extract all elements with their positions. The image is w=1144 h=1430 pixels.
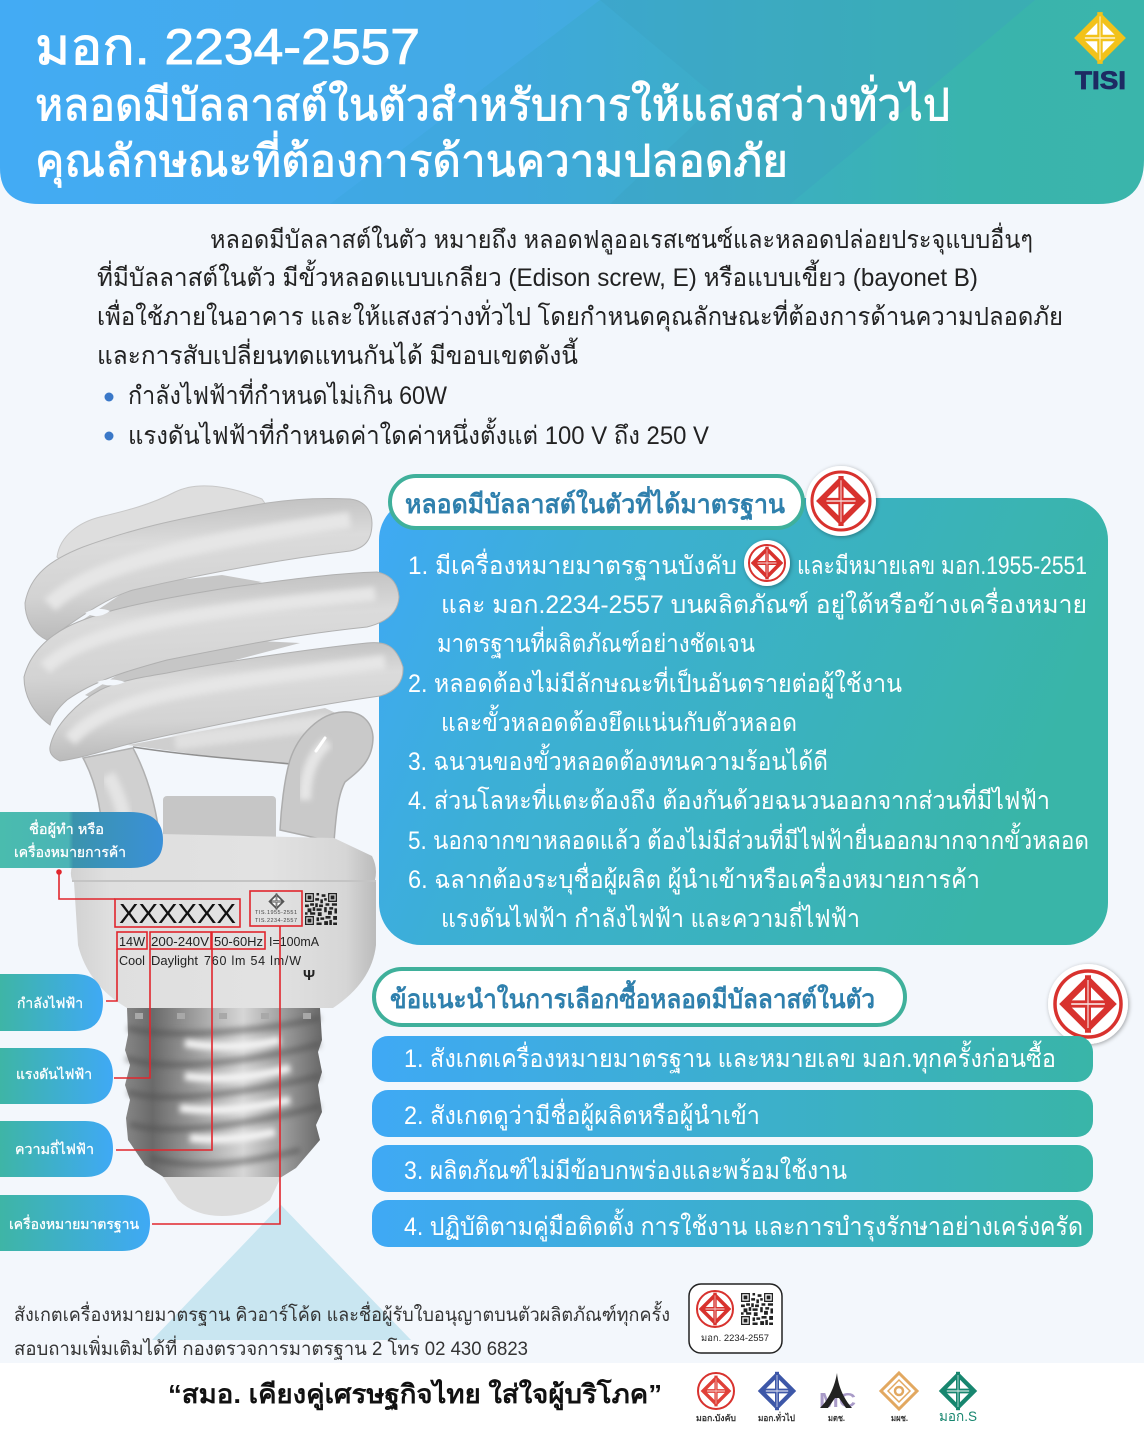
logo: community: มผช. bbox=[891, 1413, 908, 1423]
logo: community bbox=[881, 1373, 917, 1423]
footer note: สอบถามเพิ่มเติมได้ที่ กองตรวจการมาตรฐาน 2 โทร 02 430 6823 bbox=[14, 1335, 528, 1360]
list items: 5. นอกจากขาหลอดแล้ว ต้องไม่มีส่วนที่มีไฟฟ้ายื่นออกมากจากขั้วหลอด bbox=[408, 822, 1089, 855]
panel heading: หลอดมีบัลลาสต์ในตัวที่ได้มาตรฐาน bbox=[405, 485, 785, 522]
left leg bbox=[83, 748, 162, 856]
logo: general: มอก.ทั่วไป bbox=[758, 1411, 795, 1423]
gaps in coil bbox=[85, 609, 125, 686]
panel: buying advice heading bbox=[374, 969, 905, 1025]
rating text: 200-240V bbox=[151, 934, 209, 949]
icon: large standard mark bbox=[1048, 964, 1128, 1044]
callout: frequency: ความถี่ไฟฟ้า bbox=[15, 1140, 94, 1157]
list items: และมีหมายเลข มอก.1955-2551 bbox=[797, 552, 1087, 580]
intro text: กำลังไฟฟ้าที่กำหนดไม่เกิน 60W bbox=[128, 378, 447, 410]
red callout lines bbox=[57, 870, 302, 1224]
callout: maker: ชื่อผู้ทำ หรือ bbox=[29, 820, 104, 838]
rating text bbox=[119, 934, 319, 949]
logo: MAC: มตช. bbox=[828, 1413, 845, 1423]
intro text: แรงดันไฟฟ้าที่กำหนดค่าใดค่าหนึ่งตั้งแต่ 100 V ถึง 250 V bbox=[128, 417, 709, 450]
callout: maker: เครื่องหมายการค้า bbox=[14, 843, 126, 860]
title line 1: หลอดมีบัลลาสต์ในตัวสำหรับการให้แสงสว่างทั่วไป bbox=[35, 74, 950, 130]
list items: และขั้วหลอดต้องยึดแน่นกับตัวหลอด bbox=[441, 704, 797, 737]
lumen text: Daylight bbox=[151, 954, 199, 968]
advice row 2 bbox=[372, 1090, 1093, 1137]
icon: inline standard mark bbox=[744, 540, 790, 586]
TISI logo: TISI bbox=[1075, 67, 1126, 95]
lumen text: 760 lm 54 lm/W bbox=[204, 954, 301, 968]
coil band 3 bbox=[50, 643, 403, 761]
advice row 1 bbox=[372, 1036, 1093, 1082]
certification badge bbox=[689, 1284, 782, 1353]
icon: mandatory standard mark bbox=[806, 466, 876, 536]
callout: voltage: แรงดันไฟฟ้า bbox=[16, 1066, 92, 1082]
advice row 4 bbox=[372, 1200, 1093, 1247]
rating text: 50-60Hz bbox=[214, 934, 263, 949]
lumen text: Cool bbox=[119, 954, 145, 968]
logo: S mark: มอก.S bbox=[939, 1408, 977, 1424]
panel: certified lamp bbox=[379, 466, 1108, 945]
advice row 4: 4. ปฏิบัติตามคู่มือติดตั้ง การใช้งาน และการบำรุงรักษาอย่างเคร่งครัด bbox=[404, 1208, 1083, 1242]
collar top bbox=[71, 834, 376, 880]
logo: S mark bbox=[939, 1372, 977, 1424]
callout: frequency bbox=[0, 1121, 113, 1177]
label on bulb: TIS.2234-2557 bbox=[255, 918, 297, 924]
standard mark bbox=[268, 893, 285, 910]
logo: MAC bbox=[819, 1373, 856, 1423]
logo: mandatory bbox=[696, 1373, 736, 1423]
intro text: และการสับเปลี่ยนทดแทนกันได้ มีขอบเขตดังนี้ bbox=[97, 337, 578, 370]
back tube bbox=[128, 708, 372, 775]
brand placeholder: XXXXXX bbox=[119, 898, 236, 929]
list items: มาตรฐานที่ผลิตภัณฑ์อย่างชัดเจน bbox=[437, 626, 755, 658]
list items: 6. ฉลากต้องระบุชื่อผู้ผลิต ผู้นำเข้าหรือเครื่องหมายการค้า bbox=[408, 862, 980, 895]
list items bbox=[408, 548, 1089, 933]
panel heading bbox=[390, 476, 803, 528]
intro text: ที่มีบัลลาสต์ในตัว มีขั้วหลอดแบบเกลียว (Edison screw, E) หรือแบบเขี้ยว (bayonet B) bbox=[97, 259, 978, 292]
class symbol: Ψ bbox=[303, 967, 315, 984]
screw base bbox=[125, 1008, 322, 1178]
footer note: สังเกตเครื่องหมายมาตรฐาน คิวอาร์โค้ด และชื่อผู้รับใบอนุญาตบนตัวผลิตภัณฑ์ทุกครั้ง bbox=[14, 1301, 670, 1327]
panel: buying advice heading: ข้อแนะนำในการเลือกซื้อหลอดมีบัลลาสต์ในตัว bbox=[390, 979, 875, 1014]
bulb illustration bbox=[24, 486, 403, 1216]
callout: power bbox=[0, 974, 103, 1031]
slogan: “สมอ. เคียงคู่เศรษฐกิจไทย ใส่ใจผู้บริโภค” bbox=[168, 1378, 662, 1412]
title code: มอก. 2234-2557 bbox=[35, 19, 420, 75]
certification badge: มอก. 2234-2557 bbox=[701, 1333, 769, 1344]
coil band 2 bbox=[24, 572, 399, 725]
intro text: เพื่อใช้ภายในอาคาร และให้แสงสว่างทั่วไป โดยกำหนดคุณลักษณะที่ต้องการด้านความปลอดภัย bbox=[97, 299, 1063, 332]
standard numbers: TIS.1955-2551 bbox=[255, 910, 297, 916]
logo: mandatory: มอก.บังคับ bbox=[696, 1413, 736, 1423]
rating text: I=100mA bbox=[269, 934, 319, 949]
QR code bbox=[305, 893, 337, 925]
label on bulb bbox=[119, 893, 337, 984]
callout: standard mark: เครื่องหมายมาตรฐาน bbox=[9, 1215, 139, 1233]
advice row 3: 3. ผลิตภัณฑ์ไม่มีข้อบกพร่องและพร้อมใช้งาน bbox=[404, 1156, 847, 1185]
coil band 1 bbox=[25, 498, 372, 640]
logo: general bbox=[758, 1372, 796, 1423]
list items: 4. ส่วนโลหะที่แตะต้องถึง ต้องกันด้วยฉนวนออกจากส่วนที่มีไฟฟ้า bbox=[408, 783, 1050, 815]
bulb tip bbox=[163, 1177, 281, 1216]
background triangle bbox=[152, 1205, 411, 1340]
callout: voltage bbox=[0, 1048, 113, 1104]
lumen text bbox=[119, 954, 301, 968]
TISI logo bbox=[1074, 12, 1126, 95]
header banner bbox=[0, 0, 1144, 204]
list items: และ มอก.2234-2557 บนผลิตภัณฑ์ อยู่ใต้หรือข้างเครื่องหมาย bbox=[441, 587, 1087, 620]
lamp body bbox=[74, 882, 376, 1008]
rating text: 14W bbox=[119, 934, 146, 949]
intro text bbox=[97, 222, 1063, 450]
advice row 3 bbox=[372, 1145, 1093, 1192]
title line 2: คุณลักษณะที่ต้องการด้านความปลอดภัย bbox=[35, 130, 788, 188]
advice row 1: 1. สังเกตเครื่องหมายมาตรฐาน และหมายเลข มอก.ทุกครั้งก่อนซื้อ bbox=[404, 1040, 1056, 1074]
advice row 2: 2. สังเกตดูว่ามีชื่อผู้ผลิตหรือผู้นำเข้า bbox=[404, 1098, 760, 1131]
callout: standard mark bbox=[0, 1195, 150, 1251]
bulb top cap bbox=[57, 486, 290, 590]
list items: แรงดันไฟฟ้า กำลังไฟฟ้า และความถี่ไฟฟ้า bbox=[441, 901, 860, 933]
footer note bbox=[14, 1301, 670, 1360]
list items: 3. ฉนวนของขั้วหลอดต้องทนความร้อนได้ดี bbox=[408, 743, 828, 776]
collar tab bbox=[163, 796, 276, 846]
callout: power: กำลังไฟฟ้า bbox=[17, 995, 83, 1011]
callout: maker bbox=[0, 812, 163, 868]
rear coil sections bbox=[75, 575, 300, 705]
list items: 2. หลอดต้องไม่มีลักษณะที่เป็นอันตรายต่อผู้ใช้งาน bbox=[408, 666, 902, 699]
right leg bbox=[280, 712, 373, 842]
list items: 1. มีเครื่องหมายมาตรฐานบังคับ bbox=[408, 548, 737, 580]
logo: MAC: MC bbox=[819, 1390, 856, 1412]
intro text: หลอดมีบัลลาสต์ในตัว หมายถึง หลอดฟลูออเรสเซนซ์และหลอดปล่อยประจุแบบอื่นๆ bbox=[210, 222, 1033, 255]
